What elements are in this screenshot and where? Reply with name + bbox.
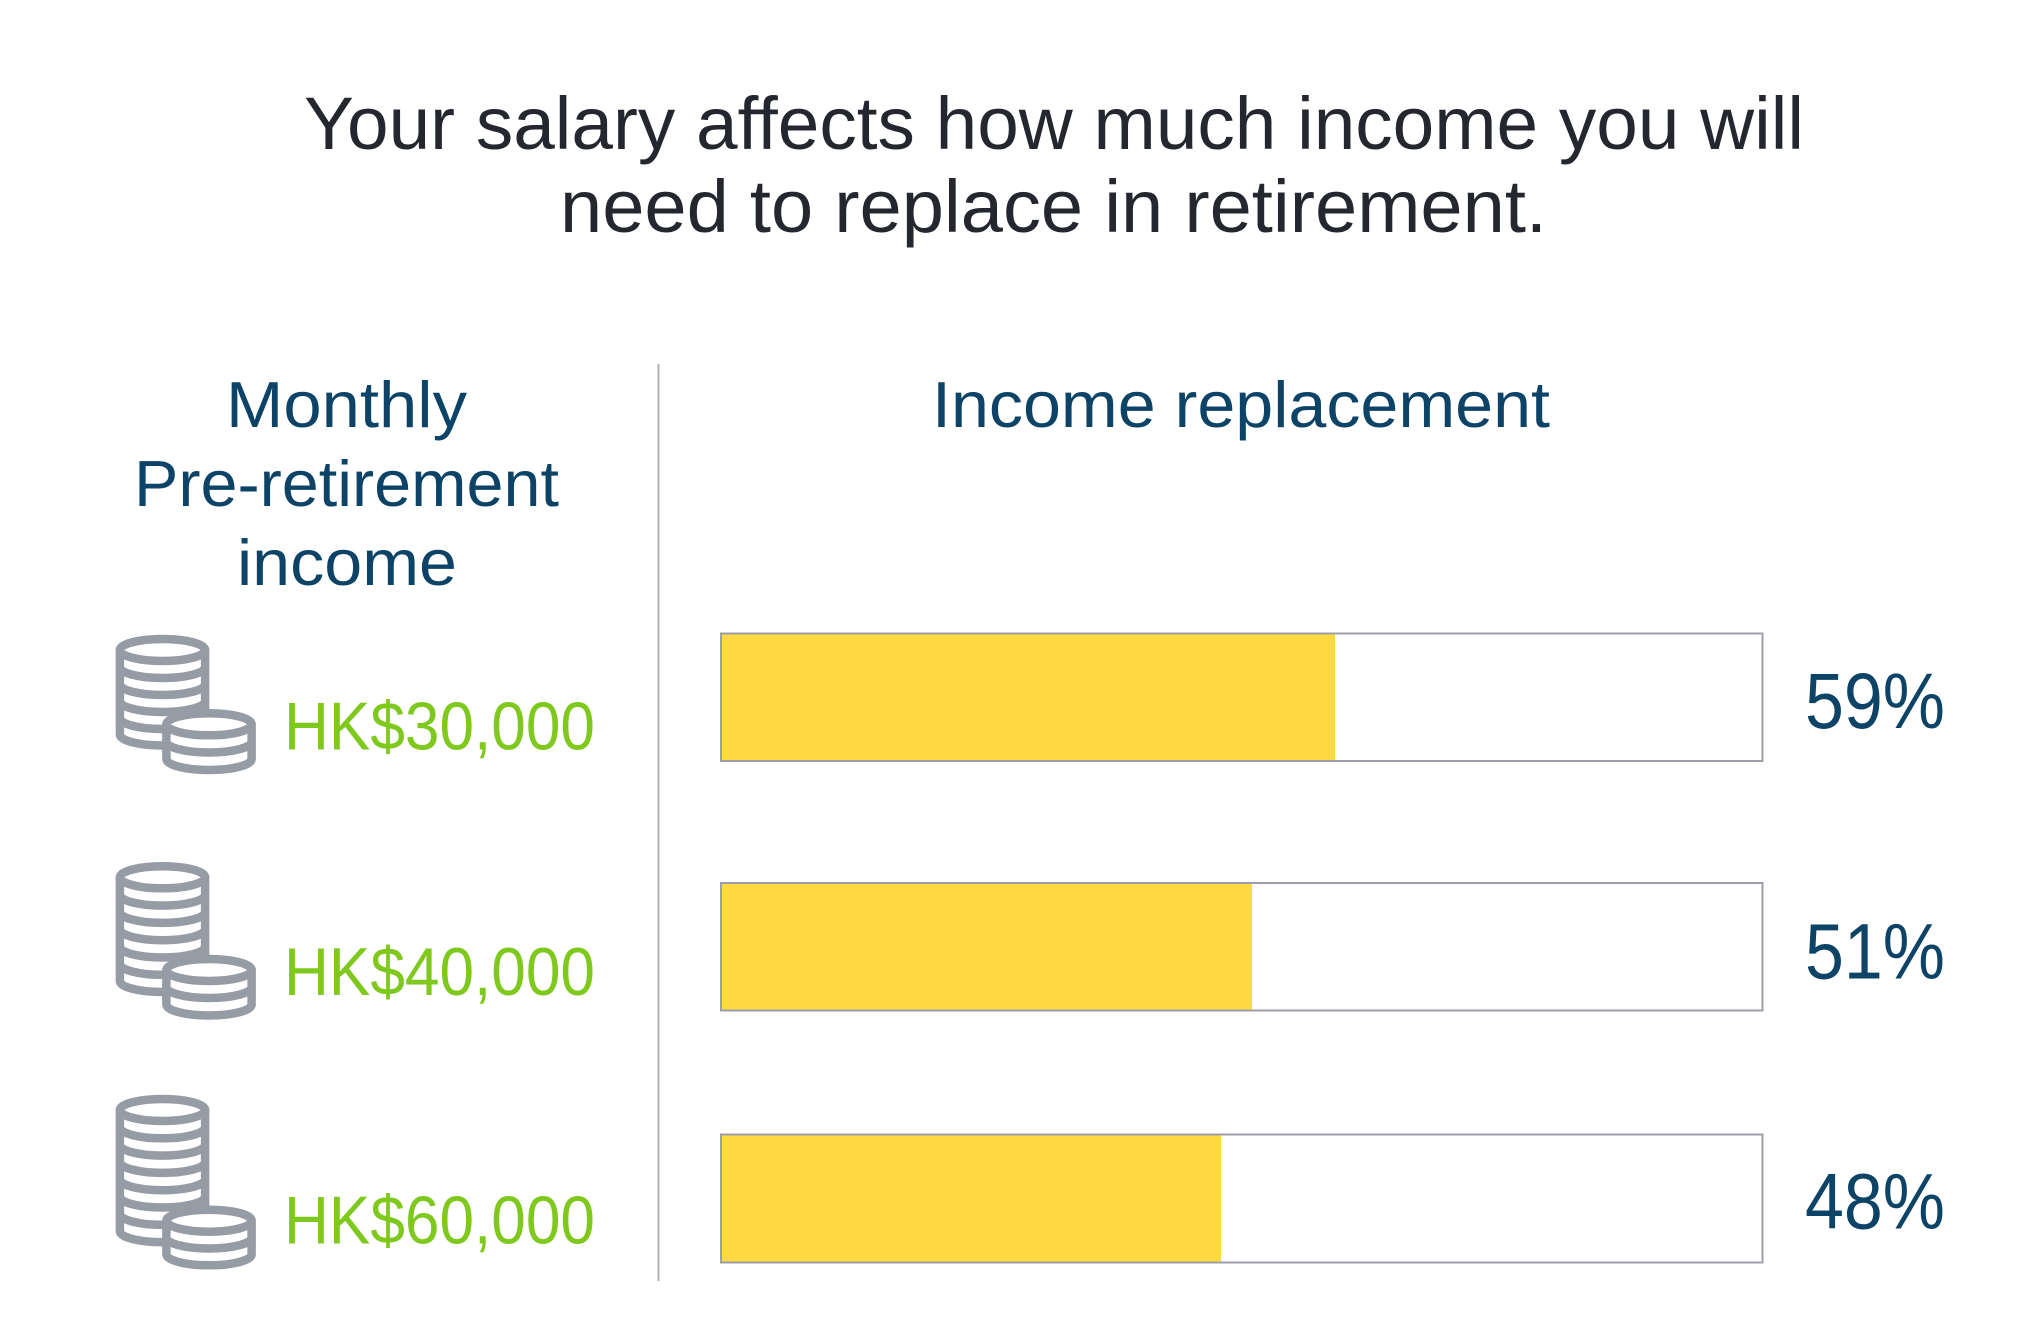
icon: coin stacks 30,000: [120, 639, 252, 770]
heading: monthly pre-retirement income: Monthly: [226, 368, 468, 441]
bar: 51%: [721, 883, 1762, 1010]
icon: coin stacks 60,000: [120, 1099, 252, 1265]
heading: monthly pre-retirement income: Pre-retirement: [134, 447, 559, 520]
vertical divider: [658, 364, 660, 1281]
bar: 59%: [721, 634, 1762, 761]
title: Your salary affects how much income you will: [304, 82, 1804, 165]
title: [304, 82, 1804, 248]
bar: 48%: [721, 1134, 1762, 1262]
label: HK$30,000: HK$30,000: [284, 688, 595, 764]
label: HK$40,000: HK$40,000: [284, 934, 595, 1010]
icon: coin stacks 40,000: [120, 866, 252, 1016]
heading: income replacement: Income replacement: [932, 368, 1550, 441]
value: 51%: 51%: [1805, 906, 1945, 996]
value: 59%: 59%: [1805, 656, 1945, 745]
value: 48%: 48%: [1805, 1156, 1945, 1246]
heading: monthly pre-retirement income: income: [237, 526, 457, 599]
row: HK$40,000: [120, 866, 595, 1016]
row: HK$60,000: [120, 1099, 595, 1265]
heading: monthly pre-retirement income: [134, 368, 559, 599]
title: need to replace in retirement.: [560, 165, 1547, 248]
row: HK$30,000: [120, 639, 595, 770]
label: HK$60,000: HK$60,000: [284, 1182, 595, 1258]
